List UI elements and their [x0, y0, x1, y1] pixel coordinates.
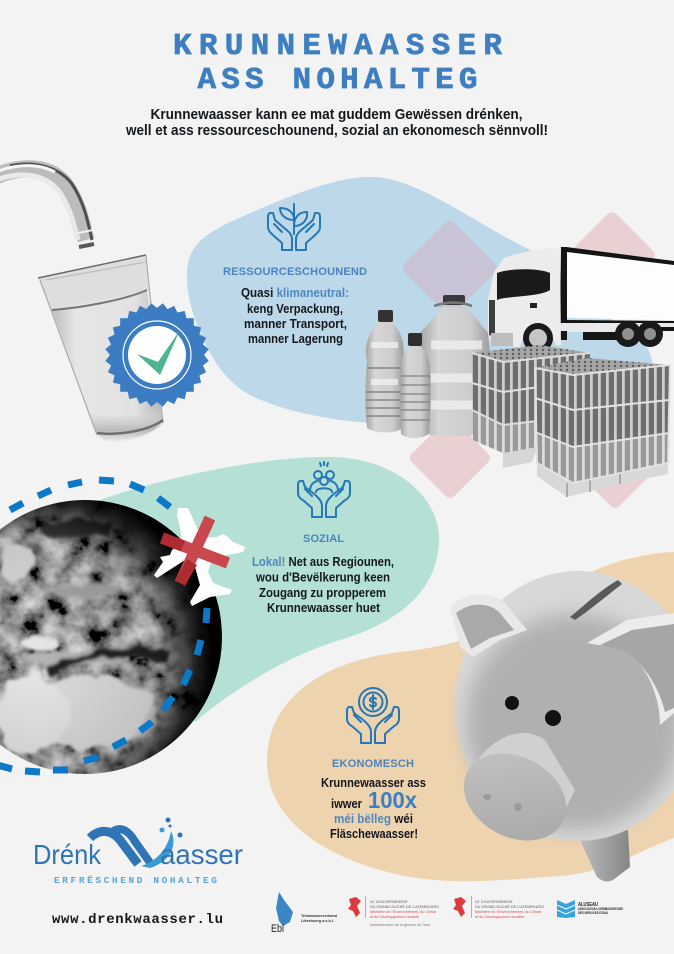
heading: ekonomesch: EKONOMESCH: [332, 758, 414, 770]
blob: blue background: [187, 177, 653, 440]
decorative diamond: purple: [401, 219, 499, 317]
subtitle: Krunnewaasser kann ee mat guddem Gewëssen drénken,: [150, 106, 522, 123]
logo: government, water administration: DU GRAND-DUCHÉ DE LUXEMBOURG: [370, 904, 439, 909]
logo: government, ministry: Ministère de l'Environnement, du Climat: [475, 910, 541, 914]
logo: Ebl: Ebl: [271, 923, 284, 935]
text: ekonomesch body: méi bëlleg wéi: [334, 812, 413, 826]
faucet: [0, 164, 94, 247]
logo: government, ministry: LE GOUVERNEMENT: [475, 900, 514, 904]
decorative diamonds: pink: [408, 210, 657, 510]
front pallet of bottles: [535, 358, 670, 497]
logo: government, ministry: et du Développement durable: [475, 915, 524, 919]
large water canister: [420, 295, 492, 436]
icon: hands holding people: [298, 462, 350, 517]
logo: government, ministry: DU GRAND-DUCHÉ DE LUXEMBOURG: [475, 904, 544, 909]
logo: Ebl: Trinkwasserverband: [301, 914, 338, 918]
logo: government, ministry: [453, 896, 544, 919]
title: KRUNNEWAASSER: [173, 29, 502, 64]
text: ekonomesch body: iwwer: [331, 797, 362, 811]
quality badge with check mark: [105, 303, 209, 407]
text: ressourceschounend body: manner Lagerung: [248, 332, 343, 346]
logo: Ebl: [271, 892, 338, 935]
logo: DrénkWaasser: aasser: [160, 839, 243, 870]
subtitle: [125, 106, 548, 139]
truck: [488, 247, 674, 353]
text: ressourceschounend body: manner Transport,: [244, 317, 347, 331]
icon: hands holding a coin: [347, 688, 399, 743]
text: sozial body: Lokal! Net aus Regiounen,: [252, 555, 394, 569]
blob: teal background: [100, 457, 439, 722]
icon: hands holding a plant: [268, 204, 320, 250]
text: ekonomesch body: 100x: [368, 787, 417, 813]
website url: www.drenkwaasser.lu: [52, 912, 223, 928]
text: sozial body: Krunnewaasser huet: [267, 601, 381, 615]
text: ekonomesch body: [321, 776, 426, 841]
back pallet of bottles: [472, 345, 590, 468]
logo: government, water administration: [348, 896, 439, 927]
logo: DrénkWaasser: Drénk: [33, 839, 102, 870]
logo: Aluseau: DES SERVICES D'EAU: [578, 911, 609, 915]
logo: government, water administration: LE GOUVERNEMENT: [370, 900, 409, 904]
text: ressourceschounend body: Quasi klimaneutral:: [241, 286, 349, 300]
globe: [0, 495, 230, 780]
logo: Ebl: Lëtzebuerg a.s.b.l.: [301, 919, 334, 923]
text: ekonomesch body: Fläschewaasser!: [330, 827, 418, 841]
heading: ressourceschounend: RESSOURCESCHOUNEND: [223, 266, 367, 278]
text: sozial body: wou d'Bevëlkerung keen: [255, 570, 390, 584]
text: sozial body: [252, 555, 394, 615]
logo: Aluseau: [557, 900, 623, 918]
icon: airplane crossed out: [154, 508, 245, 606]
text: sozial body: Zougang zu propperem: [259, 586, 386, 600]
logo tagline: ERFRËSCHEND NOHALTEG: [54, 875, 217, 886]
text: ressourceschounend body: [241, 286, 349, 346]
logo: government, water administration: Ministère de l'Environnement, du Climat: [370, 910, 436, 914]
subtitle: well et ass ressourceschounend, sozial an ekonomesch sënnvoll!: [125, 122, 548, 139]
logo: DrénkWaasser: [33, 818, 243, 870]
flight route dashes: [0, 480, 207, 772]
title: ASS NOHALTEG: [198, 63, 478, 98]
heading: sozial: SOZIAL: [303, 533, 344, 545]
piggy bank: [449, 571, 674, 881]
text: ressourceschounend body: keng Verpackung,: [247, 302, 343, 316]
blob: peach background: [267, 552, 674, 881]
title: [173, 29, 502, 98]
logo: Aluseau: ASSOCIATION LUXEMBOURGEOISE: [578, 907, 623, 911]
large water bottle: [365, 310, 404, 432]
glass of water: [38, 255, 163, 442]
logo: government, water administration: Administration de la gestion de l'eau: [370, 923, 430, 927]
logo: Aluseau: ALUSEAU: [578, 902, 598, 908]
text: ekonomesch body: Krunnewaasser ass: [321, 776, 426, 790]
small water bottle: [400, 333, 430, 438]
logo: government, water administration: et du Développement durable: [370, 915, 419, 919]
